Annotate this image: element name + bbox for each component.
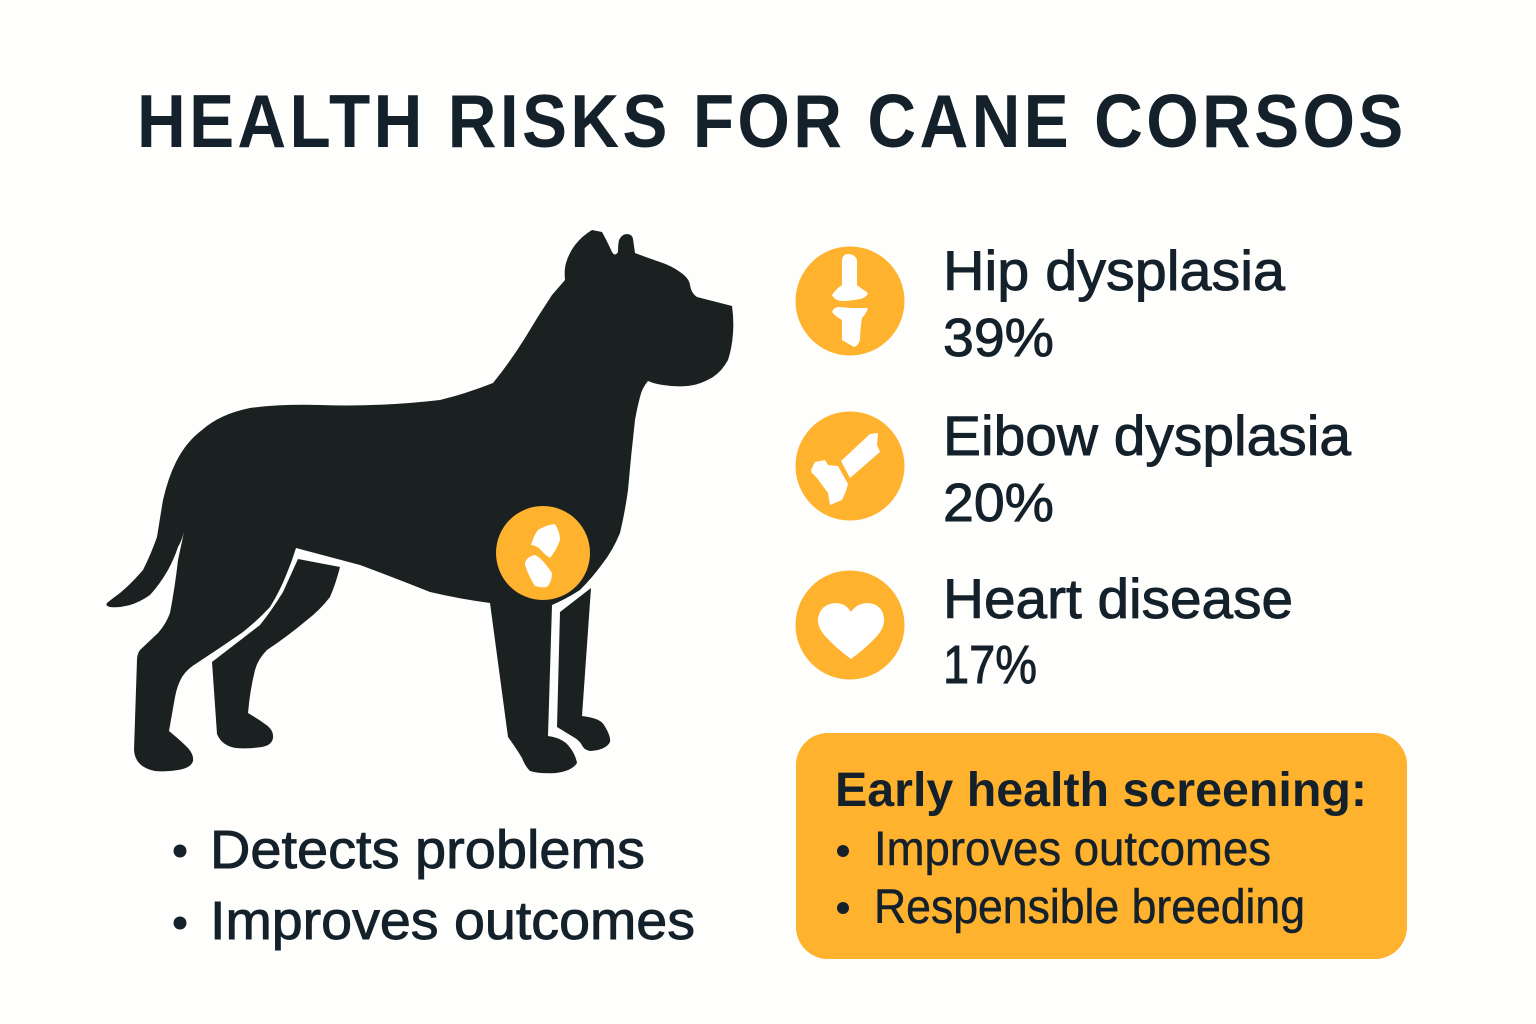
joint bone fragments <box>531 524 560 558</box>
callout panel <box>796 733 1407 959</box>
dog far hind leg <box>212 559 340 748</box>
callout bullet: responsible breeding: Respensible breeding <box>874 881 1305 934</box>
value: 20%: 20% <box>943 473 1054 533</box>
value: 17%: 17% <box>943 635 1037 695</box>
bullet: detects problems: Detects problems <box>210 820 645 880</box>
label: heart disease: Heart disease <box>943 567 1293 630</box>
dog silhouette illustration <box>106 230 733 773</box>
dog far front leg <box>557 588 610 751</box>
value: 39%: 39% <box>943 308 1054 368</box>
callout heading: Early health screening: <box>835 764 1367 817</box>
bullet: improves outcomes: Improves outcomes <box>210 891 695 951</box>
title: HEALTH RISKS FOR CANE CORSOS <box>137 80 1403 164</box>
icon: elbow joint <box>796 412 904 520</box>
callout: early health screening <box>796 733 1407 959</box>
risk: elbow dysplasia <box>796 404 1352 533</box>
icon: hip joint <box>796 246 904 356</box>
icon: heart <box>796 570 904 680</box>
label: hip dysplasia: Hip dysplasia <box>943 239 1286 302</box>
label: elbow dysplasia: Eibow dysplasia <box>943 404 1352 467</box>
risk: heart disease <box>796 567 1293 695</box>
bullet list under dog <box>174 820 695 951</box>
risk: hip dysplasia <box>796 239 1286 368</box>
highlighted joint circle on dog <box>496 506 590 600</box>
callout bullet: improves outcomes: Improves outcomes <box>874 823 1271 876</box>
dog body, head and near legs <box>106 230 733 773</box>
